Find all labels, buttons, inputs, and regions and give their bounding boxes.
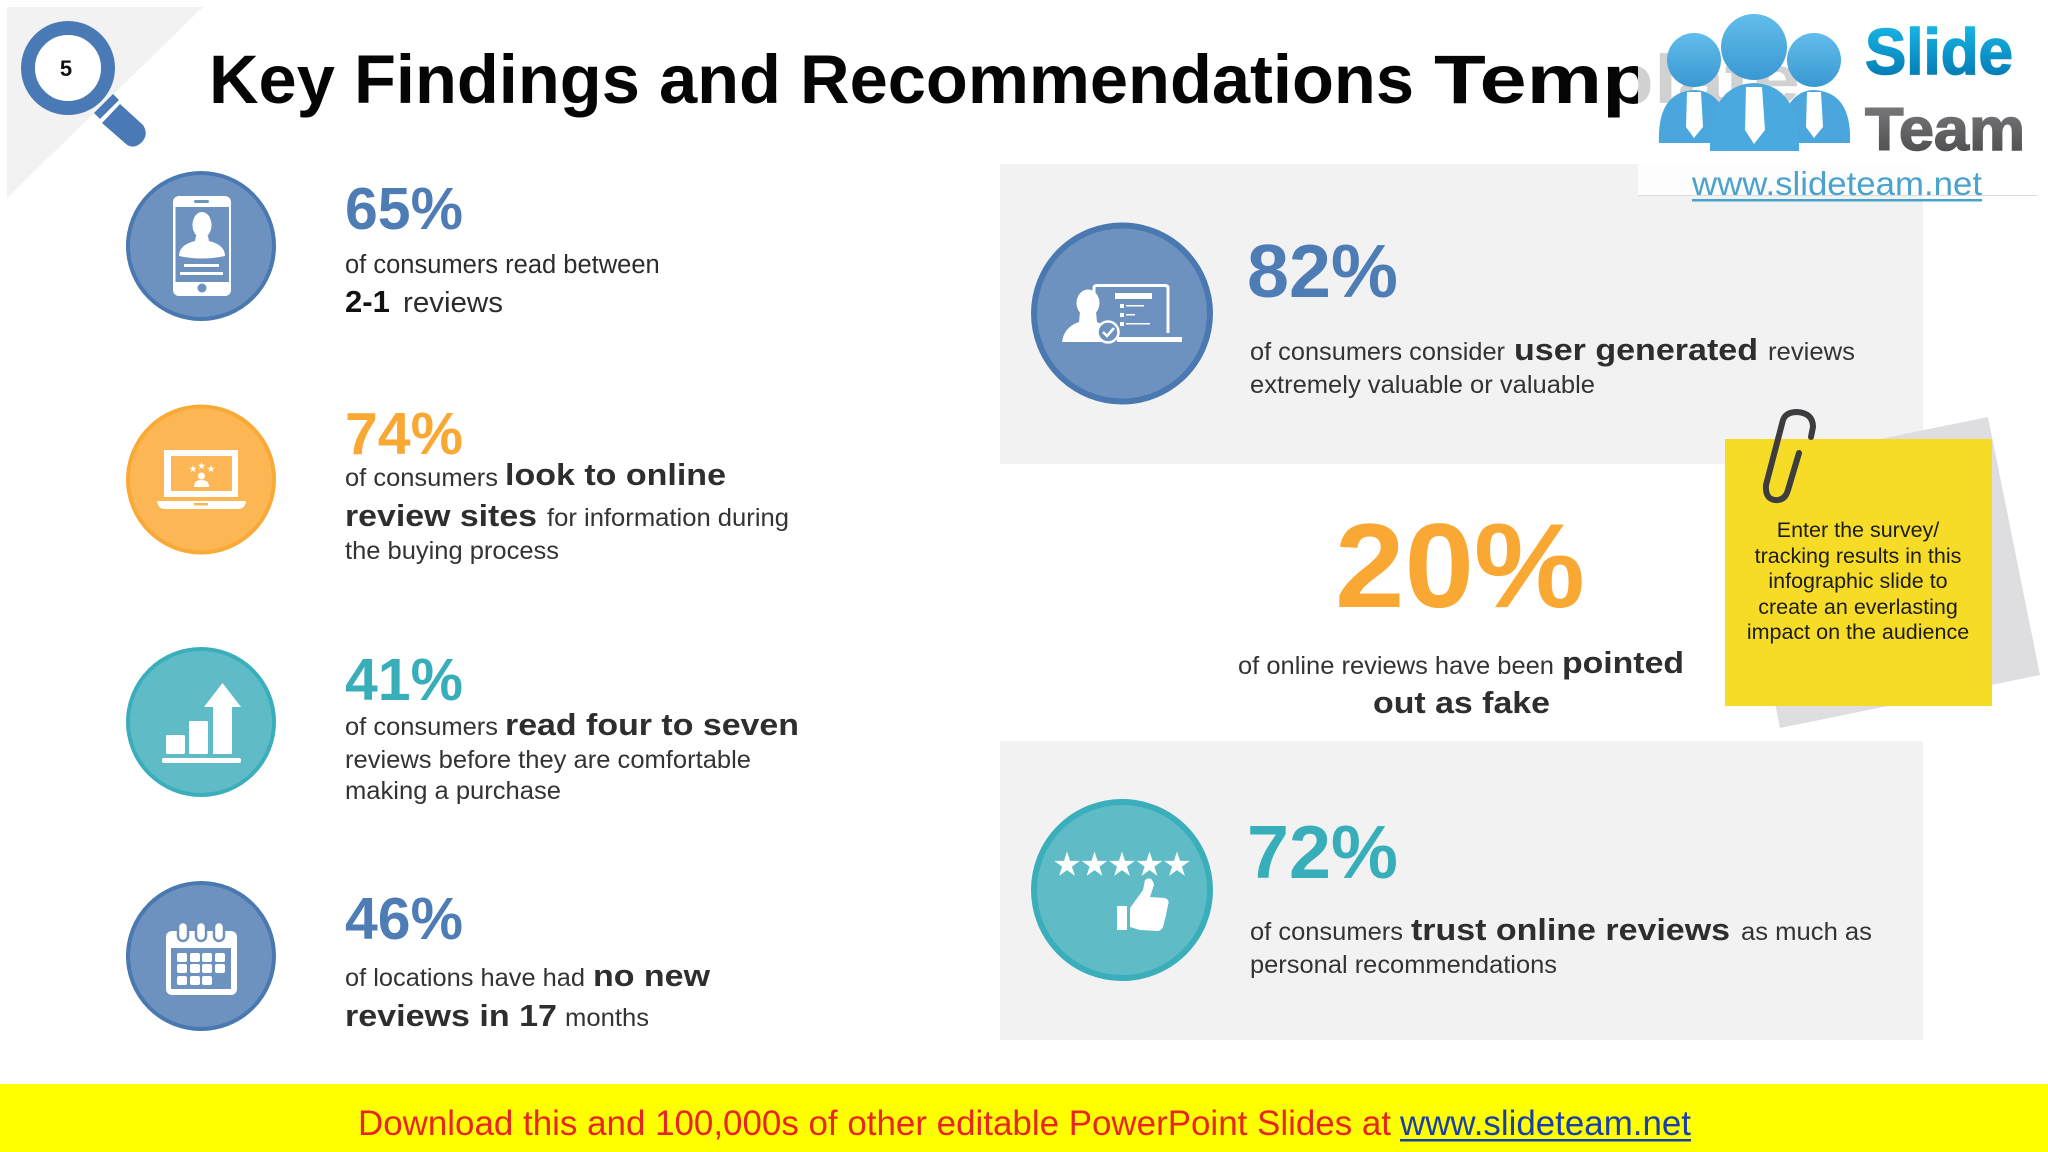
note text: create an everlasting: [1758, 595, 1958, 619]
text: 41% description: of consumers: [345, 713, 498, 741]
note text: infographic slide to: [1768, 569, 1948, 593]
logo people: [1659, 14, 1850, 151]
banner text: Download this and 100,000s of other editable PowerPoint Slides at: [358, 1104, 1391, 1143]
text: 41% description: making a purchase: [345, 777, 561, 805]
icon: calendar: [128, 883, 274, 1029]
text: 20% description: pointed: [1562, 645, 1684, 680]
panel: user generated reviews background: [1000, 164, 1923, 464]
text: 65% description: of consumers read between: [345, 251, 660, 279]
icon: rising bars with arrow: [128, 649, 274, 795]
figure: 65%: 65%: [345, 176, 463, 242]
figure: 74%: 74%: [345, 401, 463, 467]
text: 72% description: [1250, 912, 1872, 979]
text: 65% description: 2-1: [345, 284, 390, 319]
corner triangle: [7, 7, 203, 198]
icon: magnifier with slide number: 5: [60, 56, 72, 81]
text: 74% description: review sites: [345, 498, 537, 533]
stat: 65 percent: [128, 173, 660, 319]
text: 72% description: trust online reviews: [1411, 912, 1730, 947]
icon: five stars and thumbs up: [1034, 802, 1210, 978]
text: 20% description: out as fake: [1373, 685, 1550, 720]
back sheet: [1728, 417, 2040, 728]
text: 20% description: of online reviews have been: [1238, 652, 1554, 680]
figure: 41%: 41%: [345, 647, 463, 713]
title: Template: [1434, 41, 1800, 118]
text: 65% description: reviews: [403, 287, 503, 319]
stat: 46 percent: [128, 883, 711, 1033]
yellow note: [1725, 439, 1992, 706]
stat: 82 percent: [1034, 226, 1855, 402]
stat: 72 percent: [1034, 802, 1872, 979]
text: 82% description: [1250, 332, 1855, 399]
text: 74% description: [345, 457, 789, 565]
icon: smartphone profile: [128, 173, 274, 319]
text: 41% description: reviews before they are comfortable: [345, 746, 751, 774]
text: 82% description: reviews: [1768, 338, 1855, 366]
icon: laptop with rating: [128, 406, 274, 552]
panel: trust online reviews background: [1000, 741, 1923, 1040]
text: 82% description: user generated: [1514, 332, 1758, 367]
text: 74% description: of consumers: [345, 464, 498, 492]
text: 82% description: extremely valuable or valuable: [1250, 371, 1595, 399]
icon: magnifier with slide number: [28, 28, 146, 147]
logo url: www.slideteam.net: [1691, 165, 1982, 202]
text: 46% description: [345, 958, 711, 1033]
bottom download banner: [0, 1084, 2048, 1152]
logo: SlideTeam: [1638, 0, 2037, 202]
figure: 20%: 20%: [1335, 499, 1585, 633]
text: 72% description: as much as: [1741, 918, 1872, 946]
text: 41% description: [345, 707, 799, 805]
text: 74% description: for information during: [547, 504, 789, 532]
stat: 20 percent: [1238, 499, 1684, 720]
text: 41% description: read four to seven: [505, 707, 799, 742]
text: 74% description: the buying process: [345, 537, 559, 565]
figure: 72%: 72%: [1247, 810, 1398, 894]
text: 20% description: [1238, 645, 1684, 720]
text: 72% description: of consumers: [1250, 918, 1403, 946]
note text: impact on the audience: [1747, 620, 1969, 644]
note text: [1747, 518, 1969, 644]
logo word: Slide: Slide: [1865, 15, 2013, 88]
text: 46% description: of locations have had: [345, 964, 585, 992]
text: 74% description: look to online: [505, 457, 726, 492]
text: 82% description: of consumers consider: [1250, 338, 1505, 366]
logo word: Team: Team: [1865, 96, 2025, 163]
icon: paper clip: [1766, 412, 1813, 500]
banner link: www.slideteam.net: [1399, 1104, 1691, 1143]
text: 72% description: personal recommendations: [1250, 951, 1557, 979]
note text: tracking results in this: [1755, 544, 1961, 568]
text: 65% description: [345, 251, 660, 319]
figure: 82%: 82%: [1247, 229, 1398, 313]
title: Key Findings and Recommendations: [209, 41, 1414, 118]
note text: Enter the survey/: [1777, 518, 1939, 542]
icon: user with checked screen: [1034, 226, 1210, 402]
text: 46% description: reviews in 17: [345, 998, 557, 1033]
stat: 74 percent: [128, 401, 789, 565]
text: 46% description: months: [565, 1004, 649, 1032]
text: 46% description: no new: [593, 958, 711, 993]
figure: 46%: 46%: [345, 886, 463, 952]
stat: 41 percent: [128, 647, 799, 805]
sticky note callout: [1725, 412, 2040, 728]
